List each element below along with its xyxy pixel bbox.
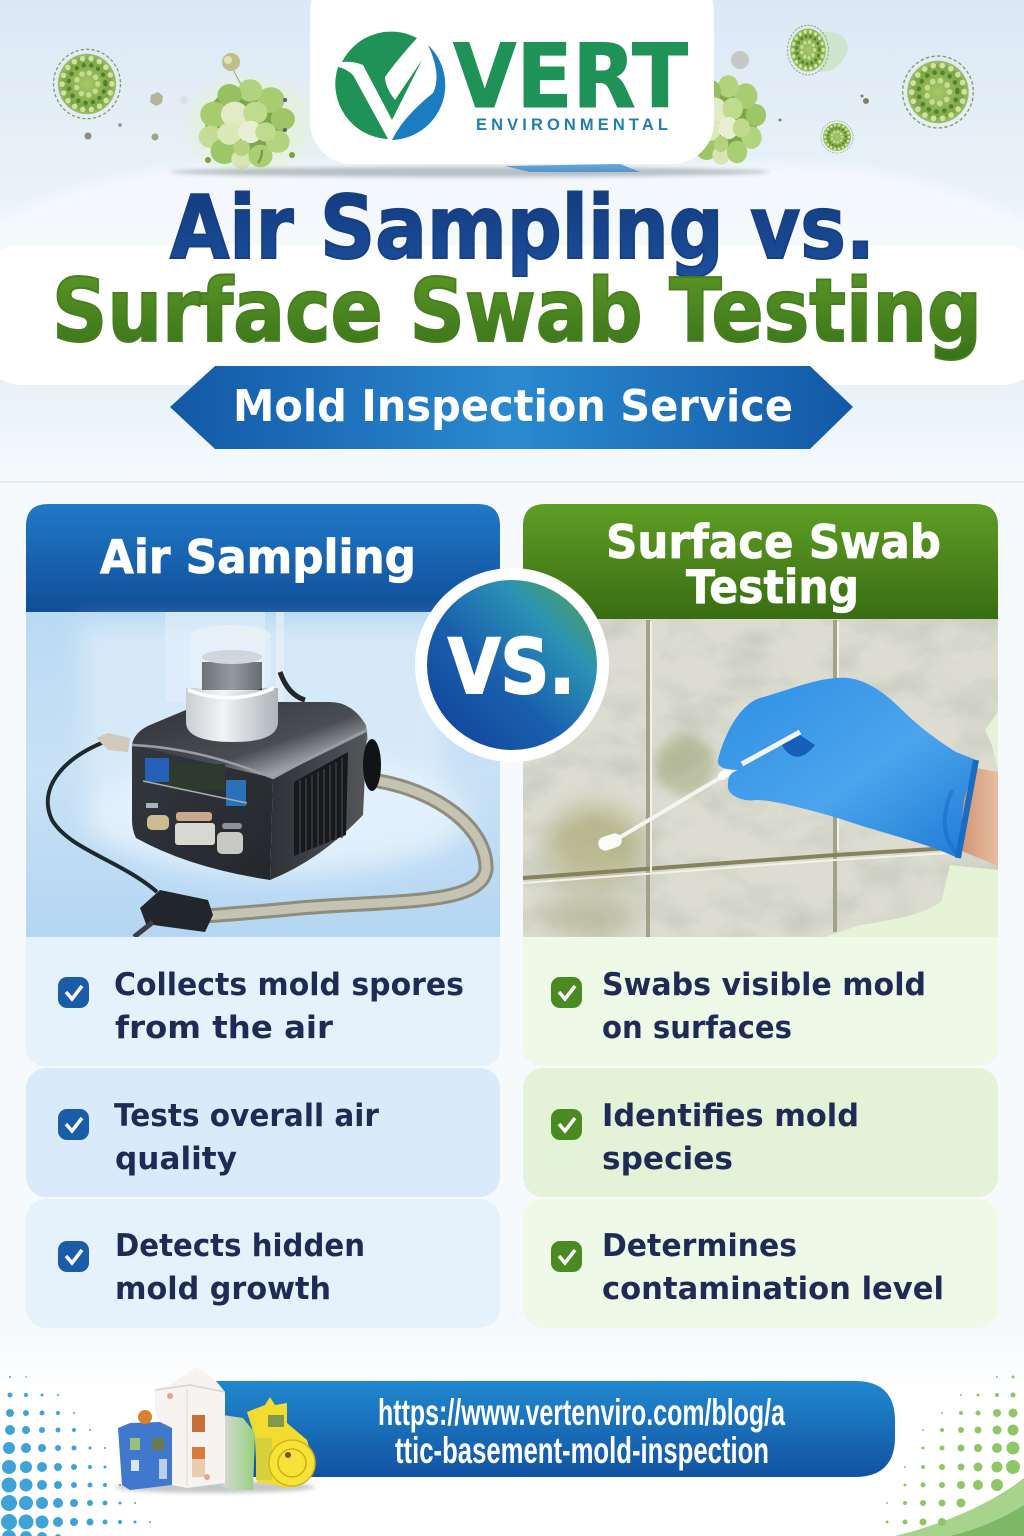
white tower xyxy=(155,1367,225,1488)
title: Air Sampling vs. xyxy=(170,177,875,279)
yellow device xyxy=(247,1397,315,1488)
photo: gloved hand swabbing tile xyxy=(523,619,998,937)
row: collects spores xyxy=(26,937,500,1066)
logo mark xyxy=(335,32,445,140)
row: air quality: Tests overall air xyxy=(114,1098,380,1134)
halftone dots: blue xyxy=(1,1376,151,1536)
footer url bar: https://www.vertenviro.com/blog/a xyxy=(378,1392,785,1433)
row: identifies species xyxy=(523,1068,998,1197)
row: contamination level: contamination level xyxy=(602,1271,944,1307)
footer url bar: ttic-basement-mold-inspection xyxy=(395,1430,769,1471)
title xyxy=(52,177,982,362)
vs badge xyxy=(415,568,609,762)
green torn paper corner xyxy=(825,712,998,937)
photo: air sampler device xyxy=(26,612,500,937)
swab xyxy=(596,735,796,852)
row: identifies species: species xyxy=(602,1141,733,1177)
panel: surface swab testing xyxy=(523,504,998,1328)
icon: air sampling devices xyxy=(115,1367,315,1493)
row: hidden mold xyxy=(26,1199,500,1328)
halftone dots: green xyxy=(886,1376,1024,1536)
cable plug xyxy=(96,733,130,752)
heading: surface swab: Surface Swab xyxy=(606,515,941,569)
heading: surface swab: Testing xyxy=(686,560,859,614)
heading: surface swab xyxy=(523,504,998,619)
title band xyxy=(0,245,1024,385)
sampling cable xyxy=(48,742,157,892)
vs badge: VS. xyxy=(448,622,575,711)
logo subtitle: ENVIRONMENTAL xyxy=(476,116,668,134)
row: swabs visible mold xyxy=(523,937,998,1066)
footer url bar xyxy=(215,1381,895,1477)
row: swabs visible mold: on surfaces xyxy=(602,1010,792,1046)
row: contamination level: Determines xyxy=(602,1228,797,1264)
row: identifies species: Identifies mold xyxy=(602,1098,859,1134)
row: hidden mold: mold growth xyxy=(115,1271,331,1307)
cable connector xyxy=(140,890,213,932)
machine body xyxy=(132,702,381,880)
row: hidden mold: Detects hidden xyxy=(115,1228,365,1264)
row: air quality xyxy=(26,1068,500,1197)
forearm xyxy=(950,766,998,866)
heading: air sampling: Air Sampling xyxy=(100,530,416,584)
logo wordmark: VERT xyxy=(453,25,688,128)
green device xyxy=(223,1415,255,1490)
row: air quality: quality xyxy=(115,1141,237,1177)
glove xyxy=(718,678,976,858)
sampling hose xyxy=(205,780,486,916)
row: collects spores: Collects mold spores xyxy=(114,967,464,1003)
panel: air sampling xyxy=(26,504,500,1328)
row: collects spores: from the air xyxy=(115,1010,334,1046)
logo panel xyxy=(170,0,770,177)
mold spores decoration xyxy=(54,25,973,173)
row: swabs visible mold: Swabs visible mold xyxy=(602,967,926,1003)
subtitle ribbon xyxy=(170,366,853,449)
blue box xyxy=(118,1410,172,1490)
heading: air sampling xyxy=(26,504,500,612)
subtitle ribbon: Mold Inspection Service xyxy=(233,381,793,432)
row: contamination level xyxy=(523,1199,998,1328)
sampler head xyxy=(186,625,278,742)
